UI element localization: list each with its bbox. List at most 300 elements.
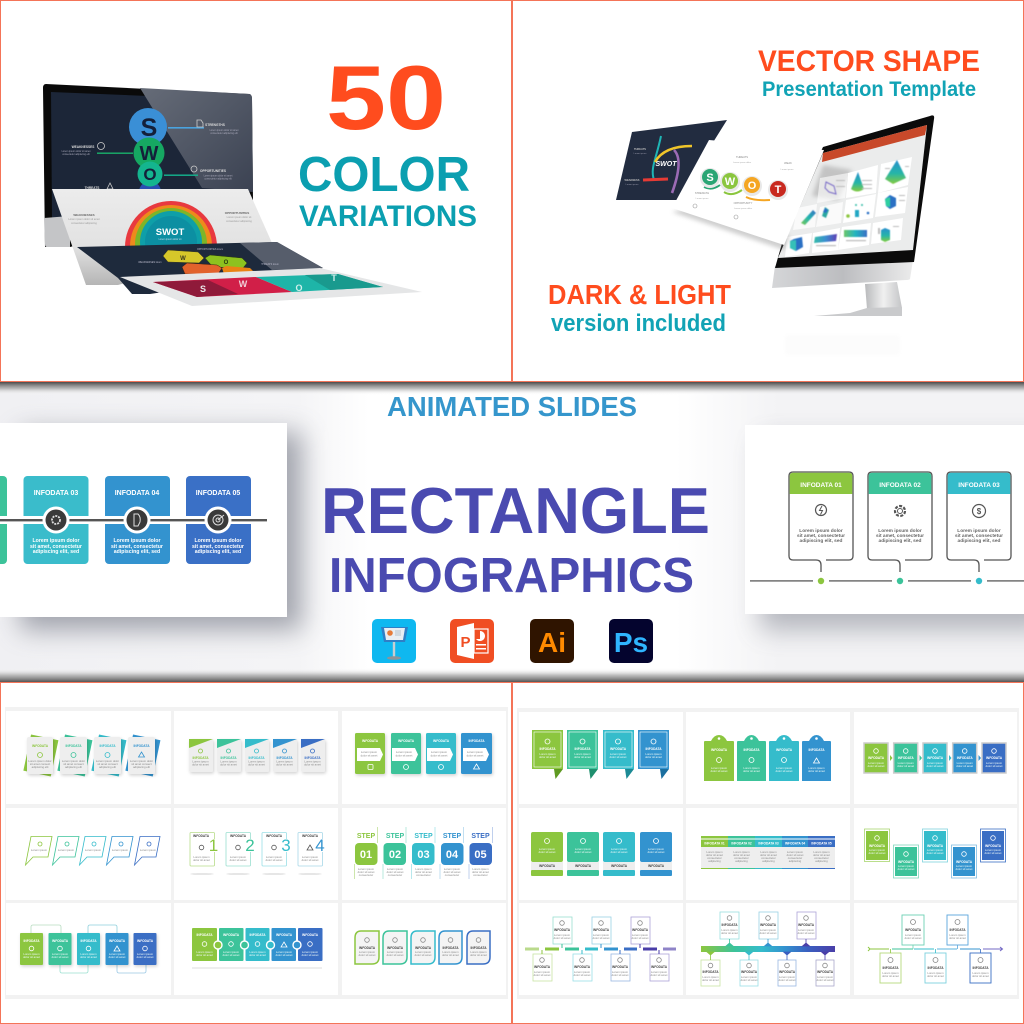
- lower cards: dolor sit amet: [702, 978, 719, 982]
- white SWOT slide: STRENGTH: [695, 191, 709, 195]
- step 4: STEP: [443, 833, 461, 840]
- card 4: [953, 743, 977, 773]
- column 5: INFODATA 05: [811, 842, 832, 846]
- opportunities label: consectetur adipiscing elit: [204, 178, 232, 180]
- card 2: INFODATA: [66, 744, 82, 748]
- card 1: dolor sit amet: [539, 850, 556, 854]
- lower cards: [533, 954, 669, 981]
- slide: arrow timeline: [854, 903, 1017, 995]
- light slide with rainbow circle: OPPORTUNITIES: [225, 211, 249, 215]
- right slide shadow: [760, 440, 1024, 630]
- card 5: dolor sit amet: [470, 953, 487, 957]
- card 5: INFODATA: [470, 946, 487, 950]
- lower cards: INFODATA: [534, 965, 551, 969]
- tilted monitor with SWOT slides: [43, 84, 422, 306]
- column 3: consectetur: [761, 856, 776, 860]
- card 3: [245, 739, 269, 772]
- slide: speech bubbles: [6, 808, 171, 900]
- lower cards: dolor sit amet: [882, 974, 899, 978]
- slide: puzzle blocks: [174, 903, 338, 995]
- strengths label: STRENGTHS: [205, 123, 225, 127]
- heading: variations: VARIATIONS: [299, 200, 477, 233]
- lower cards: dolor sit amet: [534, 973, 551, 977]
- light slide with rainbow circle: Lorem ipsum dolor sit: [227, 215, 252, 219]
- tag 1: dolor sit amet: [711, 769, 728, 773]
- card 2: INFODATA: [230, 834, 247, 838]
- block 2: INFODATA: [52, 939, 69, 943]
- step 5: 05: [474, 849, 487, 861]
- card 4: sit amet consect: [131, 762, 152, 766]
- slide: cards with footer: [519, 808, 683, 900]
- slide: outlined leaf cards: [342, 903, 506, 995]
- dark slide with hexagons: O: [224, 260, 229, 266]
- card 4: Lorem ipsum: [442, 950, 459, 954]
- arrow 1: [890, 755, 892, 761]
- card 2: dolor sit amet: [230, 858, 247, 862]
- slide: connected blocks: [6, 903, 171, 995]
- step 4: [440, 827, 464, 879]
- column 5: Lorem ipsum: [813, 850, 830, 854]
- step 3: [412, 827, 435, 879]
- card 1: INFODATA: [32, 744, 49, 748]
- card 2: dolor sit amet: [897, 764, 914, 768]
- title: infographics: INFOGRAPHICS: [329, 549, 694, 603]
- screen glare: [140, 88, 253, 192]
- light slide with red and teal bands: S: [200, 284, 206, 294]
- top band shadow: [0, 382, 1024, 395]
- weaknesses label: WEAKNESSES: [72, 145, 94, 149]
- light slide with rainbow circle: consectetur adipiscing: [226, 219, 252, 223]
- card 4: INFODATA: [276, 756, 293, 760]
- dark SWOT slide: WEAKNESS: [624, 178, 640, 182]
- step 1: 01: [360, 849, 372, 861]
- lower cards: INFODATA: [741, 970, 758, 974]
- card 2: Lorem ipsum: [220, 760, 237, 764]
- card 4: dolor sit amet: [467, 754, 484, 758]
- card 3: Lorem ipsum dolor: [96, 759, 119, 763]
- column 2: INFODATA 02: [731, 842, 752, 846]
- slide: speech flags: [519, 712, 683, 804]
- card 1: [864, 829, 890, 862]
- column 3: adipiscing: [762, 859, 775, 863]
- card 3: adipiscing elit: [99, 765, 116, 769]
- white SWOT slide: Lorem ipsum: [696, 197, 708, 200]
- card 4: INFODATA: [468, 739, 485, 743]
- card 3: dolor sit amet: [431, 754, 448, 758]
- card 3: INFODATA: [248, 756, 265, 760]
- block 5: [298, 928, 322, 961]
- lower cards: Lorem ipsum: [927, 971, 944, 975]
- card 1: Lorem ipsum: [869, 848, 886, 852]
- card 4: [439, 931, 462, 964]
- lower cards: [880, 949, 991, 983]
- opportunities label: OPPORTUNITIES: [200, 169, 226, 173]
- block 3: adipiscing elit, sed: [33, 549, 79, 555]
- arrow 3: [949, 755, 952, 761]
- dark SWOT slide: THREATS: [634, 147, 646, 151]
- card 5: Lorem ipsum: [986, 761, 1003, 765]
- card 5: [982, 743, 1006, 773]
- flag 2: INFODATA: [574, 747, 591, 751]
- opportunities label: Lorem ipsum dolor sit amet: [204, 174, 233, 178]
- upper cards: [902, 915, 968, 949]
- card 3: INFODATA: [927, 756, 944, 760]
- monitor bezel: [775, 115, 934, 268]
- step 2: 02: [389, 849, 401, 861]
- lower cards: Lorem ipsum: [534, 970, 551, 974]
- slide: numbered outline cards: [174, 808, 338, 900]
- column 5: [808, 836, 835, 869]
- monitor screen: [778, 125, 927, 258]
- block 1: Lorem ipsum: [196, 950, 213, 954]
- icon: powerpoint: [450, 619, 494, 663]
- card 1: [190, 832, 218, 866]
- card 4: dolor sit amet: [302, 858, 319, 862]
- flag 1: [532, 730, 563, 779]
- card 2: [391, 733, 421, 774]
- card 2: dolor sit amet: [575, 850, 592, 854]
- lower cards: Lorem ipsum: [817, 975, 834, 979]
- thumbnail charts: [790, 160, 909, 251]
- card 4: [273, 739, 297, 772]
- SWOT circles: W: [140, 143, 159, 165]
- block 1: dolor sit amet: [23, 955, 40, 959]
- column 2: adipiscing: [735, 859, 748, 863]
- card 2: dolor sit amet: [220, 762, 237, 766]
- connector rings: [214, 941, 301, 949]
- timeline segments: [525, 948, 676, 950]
- heading: 50: 50: [326, 48, 446, 149]
- card 01: adipiscing elit, sed: [800, 538, 843, 544]
- card 1: [531, 832, 563, 876]
- card 4: [298, 832, 328, 866]
- block 3: [24, 476, 88, 564]
- card 1: Lorem ipsum dolor: [28, 759, 52, 763]
- upper cards: dolor sit amet: [593, 936, 610, 940]
- step 1: consectetur: [359, 873, 373, 877]
- block 4: dolor sit amet: [109, 955, 126, 959]
- flag 1: Lorem ipsum: [539, 752, 556, 756]
- card 3: dolor sit amet: [248, 762, 265, 766]
- card 3: Lorem ipsum: [248, 760, 265, 764]
- step 2: STEP: [386, 833, 404, 840]
- card 4: Lorem ipsum: [302, 855, 319, 859]
- flag 3: INFODATA: [610, 747, 627, 751]
- card 3: Lorem ipsum: [927, 761, 944, 765]
- column 2: dolor sit amet: [733, 853, 750, 857]
- card 5: [301, 739, 325, 772]
- dark slide with hexagons: WEAKNESSES lorem: [138, 261, 162, 264]
- card 4: Lorem ipsum: [467, 750, 484, 754]
- lower cards: INFODATA: [574, 965, 591, 969]
- card 02: sit amet, consectetur: [876, 533, 924, 539]
- dark SWOT slide: [616, 120, 727, 200]
- step 4: Lorem ipsum: [444, 867, 461, 871]
- lower cards: dolor sit amet: [741, 978, 758, 982]
- panel: thumbnail grid right: [512, 682, 1024, 1024]
- lower cards: Lorem ipsum: [741, 975, 758, 979]
- block 2: [219, 928, 244, 961]
- slide: segmented timeline: [519, 903, 683, 995]
- step 3: consectetur: [416, 873, 431, 877]
- dark slide with hexagons: [77, 242, 323, 294]
- card 4: [952, 845, 976, 878]
- bubble 3: Lorem ipsum: [85, 848, 102, 852]
- card 3: [411, 931, 435, 964]
- upper cards: dolor sit amet: [632, 936, 649, 940]
- column 1: consectetur: [707, 856, 722, 860]
- upper cards: dolor sit amet: [905, 936, 922, 940]
- card 4: Lorem ipsum: [957, 761, 973, 765]
- block 4: Lorem ipsum: [109, 952, 126, 956]
- card 2: Lorem ipsum: [575, 847, 592, 851]
- monitor chin: [772, 254, 914, 288]
- card 1: dolor sit amet: [361, 754, 378, 758]
- card 1: sit amet consect: [30, 762, 50, 766]
- card 01: [789, 472, 853, 584]
- flag 4: dolor sit amet: [645, 755, 662, 759]
- heading: vector shape: VECTOR SHAPE: [758, 45, 980, 78]
- card 4: [125, 734, 160, 776]
- block 4: sit amet, consectetur: [111, 544, 163, 550]
- heading: color: COLOR: [298, 148, 470, 202]
- card 03: sit amet, consectetur: [955, 533, 1003, 539]
- upper cards: dolor sit amet: [721, 931, 738, 935]
- card 01: sit amet, consectetur: [797, 533, 845, 539]
- timeline segments: [750, 580, 1024, 582]
- card 3: dolor sit amet: [266, 858, 283, 862]
- tag 3: dolor sit amet: [776, 769, 793, 773]
- panel: central title band: [0, 382, 1024, 682]
- column 5: adipiscing: [815, 859, 828, 863]
- block 3: dolor sit amet: [80, 955, 97, 959]
- upper cards: Lorem ipsum: [721, 928, 738, 932]
- card 2: 2: [245, 836, 255, 855]
- grid backdrop: [5, 707, 508, 999]
- step 2: [383, 827, 406, 879]
- block 3: sit amet, consectetur: [30, 544, 82, 550]
- card 4: INFODATA: [648, 864, 665, 868]
- card 02: Lorem ipsum dolor: [878, 528, 922, 534]
- arrow 4: [978, 755, 981, 761]
- card 4: Lorem ipsum: [276, 760, 293, 764]
- block 3: INFODATA 03: [34, 490, 78, 497]
- column 3: [755, 836, 782, 869]
- card 3: Lorem ipsum: [927, 848, 944, 852]
- panel: thumbnail grid left: [0, 682, 512, 1024]
- left slide shadow: [20, 432, 302, 630]
- bubble 1: [26, 836, 52, 865]
- block 3: dolor sit amet: [249, 953, 266, 957]
- step 1: Lorem ipsum: [358, 867, 375, 871]
- heading: dark and light: DARK & LIGHT: [548, 279, 731, 310]
- light slide with rainbow circle: [52, 189, 272, 293]
- lower cards: dolor sit amet: [612, 973, 629, 977]
- slide: tilted cards: [6, 711, 171, 804]
- arrow line: [868, 947, 1002, 951]
- card 2: Lorem ipsum: [230, 855, 247, 859]
- step 3: 03: [417, 849, 430, 861]
- card 5: dolor sit amet: [304, 762, 321, 766]
- white SWOT slide: OPPORTUNITY: [734, 201, 753, 205]
- card 3: Lorem ipsum: [611, 847, 628, 851]
- upper cards: Lorem ipsum: [905, 933, 922, 937]
- slide: framed process cards: [854, 712, 1017, 804]
- card 5: [467, 931, 490, 964]
- flag 3: Lorem ipsum: [610, 752, 627, 756]
- card 3: dolor sit amet: [927, 851, 944, 855]
- upper cards: [553, 917, 650, 944]
- card 3: [923, 743, 947, 773]
- column 4: adipiscing: [789, 859, 802, 863]
- card 2: Lorem ipsum: [898, 864, 915, 868]
- tag 1: INFODATA: [711, 748, 728, 752]
- card 3: INFODATA: [611, 864, 628, 868]
- column 4: consectetur: [788, 856, 802, 860]
- block 2: [0, 476, 7, 564]
- card 5: dolor sit amet: [985, 851, 1002, 855]
- card 4: [640, 832, 672, 876]
- light slide with red and teal bands: O: [295, 283, 303, 293]
- card 3: dolor sit amet: [927, 764, 944, 768]
- card 1: Lorem ipsum: [868, 761, 885, 765]
- screen title bar: [822, 125, 927, 162]
- block 5: dolor sit amet: [302, 953, 319, 957]
- card 4: 4: [315, 836, 325, 855]
- card 1: dolor sit amet: [192, 762, 209, 766]
- block 5: INFODATA: [302, 933, 319, 937]
- card 4: dolor sit amet: [956, 764, 973, 768]
- slide: wedge cards: [174, 711, 338, 804]
- column 4: Lorem ipsum: [787, 850, 804, 854]
- step 3: Lorem ipsum: [415, 867, 432, 871]
- lower cards: INFODATA: [612, 965, 629, 969]
- card 02: INFODATA 02: [879, 482, 921, 489]
- strengths label: consectetur adipiscing elit: [210, 132, 238, 135]
- card 3: [262, 832, 292, 866]
- card 5: dolor sit amet: [986, 764, 1003, 768]
- tag 2: INFODATA: [744, 748, 760, 752]
- column 2: Lorem ipsum: [733, 850, 750, 854]
- bubble 5: [134, 836, 160, 865]
- card 3: INFODATA: [415, 946, 432, 950]
- flag 2: Lorem ipsum: [574, 752, 591, 756]
- lower cards: INFODATA: [779, 970, 796, 974]
- block 3: [77, 933, 100, 965]
- bubble 4: [106, 836, 133, 865]
- bubble 3: [80, 836, 106, 865]
- card 1: 1: [209, 836, 218, 855]
- dark slide with hexagons: OPPORTUNITIES lorem: [197, 248, 223, 251]
- card 1: Lorem ipsum: [192, 760, 209, 764]
- card 3: 3: [281, 836, 291, 855]
- upper cards: Lorem ipsum: [798, 928, 815, 932]
- card 2: [217, 739, 241, 772]
- tag 1: [704, 735, 734, 781]
- subheading: version included: version included: [551, 310, 726, 337]
- light slide with rainbow circle: Lorem ipsum dolor sit: [159, 238, 182, 241]
- icon: powerpoint: P: [460, 634, 471, 651]
- card 2: [567, 832, 599, 876]
- slide: table: [686, 808, 850, 900]
- bubble 5: Lorem ipsum: [140, 848, 157, 852]
- column 1: Lorem ipsum: [706, 850, 723, 854]
- slide thumbnails on screen: [785, 157, 912, 257]
- card 3: INFODATA: [100, 744, 116, 748]
- card 1: [355, 931, 379, 964]
- upper cards: Lorem ipsum: [760, 928, 777, 932]
- card 1: Lorem ipsum: [361, 750, 378, 754]
- monitor stand: [814, 282, 902, 316]
- card 4: INFODATA: [302, 834, 319, 838]
- card 3: Lorem ipsum: [431, 750, 448, 754]
- column 1: [701, 836, 728, 869]
- strengths label: Lorem ipsum dolor sit amet: [210, 129, 239, 132]
- column 4: [782, 836, 808, 869]
- slide: gradient bar timeline: [686, 903, 850, 995]
- card 2: sit amet consect: [63, 762, 84, 766]
- tag 2: Lorem ipsum: [743, 766, 760, 770]
- card 1: [189, 739, 213, 772]
- icon: keynote: [372, 619, 416, 663]
- card 1: dolor sit amet: [193, 858, 210, 862]
- upper cards: INFODATA: [593, 928, 610, 932]
- card 4: [461, 733, 492, 774]
- flag 1: dolor sit amet: [539, 755, 556, 759]
- upper cards: dolor sit amet: [760, 931, 777, 935]
- lower cards: dolor sit amet: [817, 978, 834, 982]
- card 2: INFODATA: [575, 864, 592, 868]
- dark SWOT slide: Lorem ipsum: [634, 152, 646, 155]
- shadow of white slide: [672, 205, 790, 250]
- flag 3: [603, 730, 634, 779]
- light slide with rainbow circle: SWOT: [156, 227, 184, 238]
- connector outlines: [31, 925, 146, 973]
- step 3: dolor sit amet: [415, 870, 432, 874]
- step 2: dolor sit amet: [387, 870, 404, 874]
- monitor reflection: [785, 335, 900, 355]
- slide: staggered cards: [854, 808, 1017, 900]
- card 2: INFODATA: [898, 860, 915, 864]
- lower cards: dolor sit amet: [651, 973, 668, 977]
- card 03: $: [977, 507, 982, 516]
- weaknesses label: consectetur adipiscing elit: [62, 153, 90, 156]
- block 4: adipiscing elit, sed: [114, 549, 160, 555]
- lower cards: Lorem ipsum: [574, 970, 591, 974]
- card 1: [23, 734, 58, 776]
- block 1: INFODATA: [196, 933, 213, 937]
- dark SWOT slide: SWOT: [656, 161, 677, 168]
- step 5: Lorem ipsum: [472, 867, 489, 871]
- SWOT circles: S: [141, 114, 157, 142]
- card 3: sit amet consect: [97, 762, 118, 766]
- block 3: [246, 928, 270, 961]
- card 1: INFODATA: [362, 739, 379, 743]
- slide: arrow label cards: [342, 711, 506, 804]
- lower cards: [701, 952, 834, 986]
- card 3: INFODATA: [433, 739, 450, 743]
- flag 3: dolor sit amet: [610, 755, 627, 759]
- lower cards: dolor sit amet: [779, 978, 796, 982]
- tag 4: Lorem ipsum: [808, 766, 825, 770]
- block 2: [48, 933, 72, 965]
- connector dots: [542, 944, 660, 954]
- heading: animated slides: ANIMATED SLIDES: [387, 391, 637, 422]
- card 1: Lorem ipsum: [193, 855, 210, 859]
- card 4: dolor sit amet: [276, 762, 293, 766]
- upper cards: INFODATA: [632, 928, 649, 932]
- white SWOT slide: THREATS: [736, 155, 748, 159]
